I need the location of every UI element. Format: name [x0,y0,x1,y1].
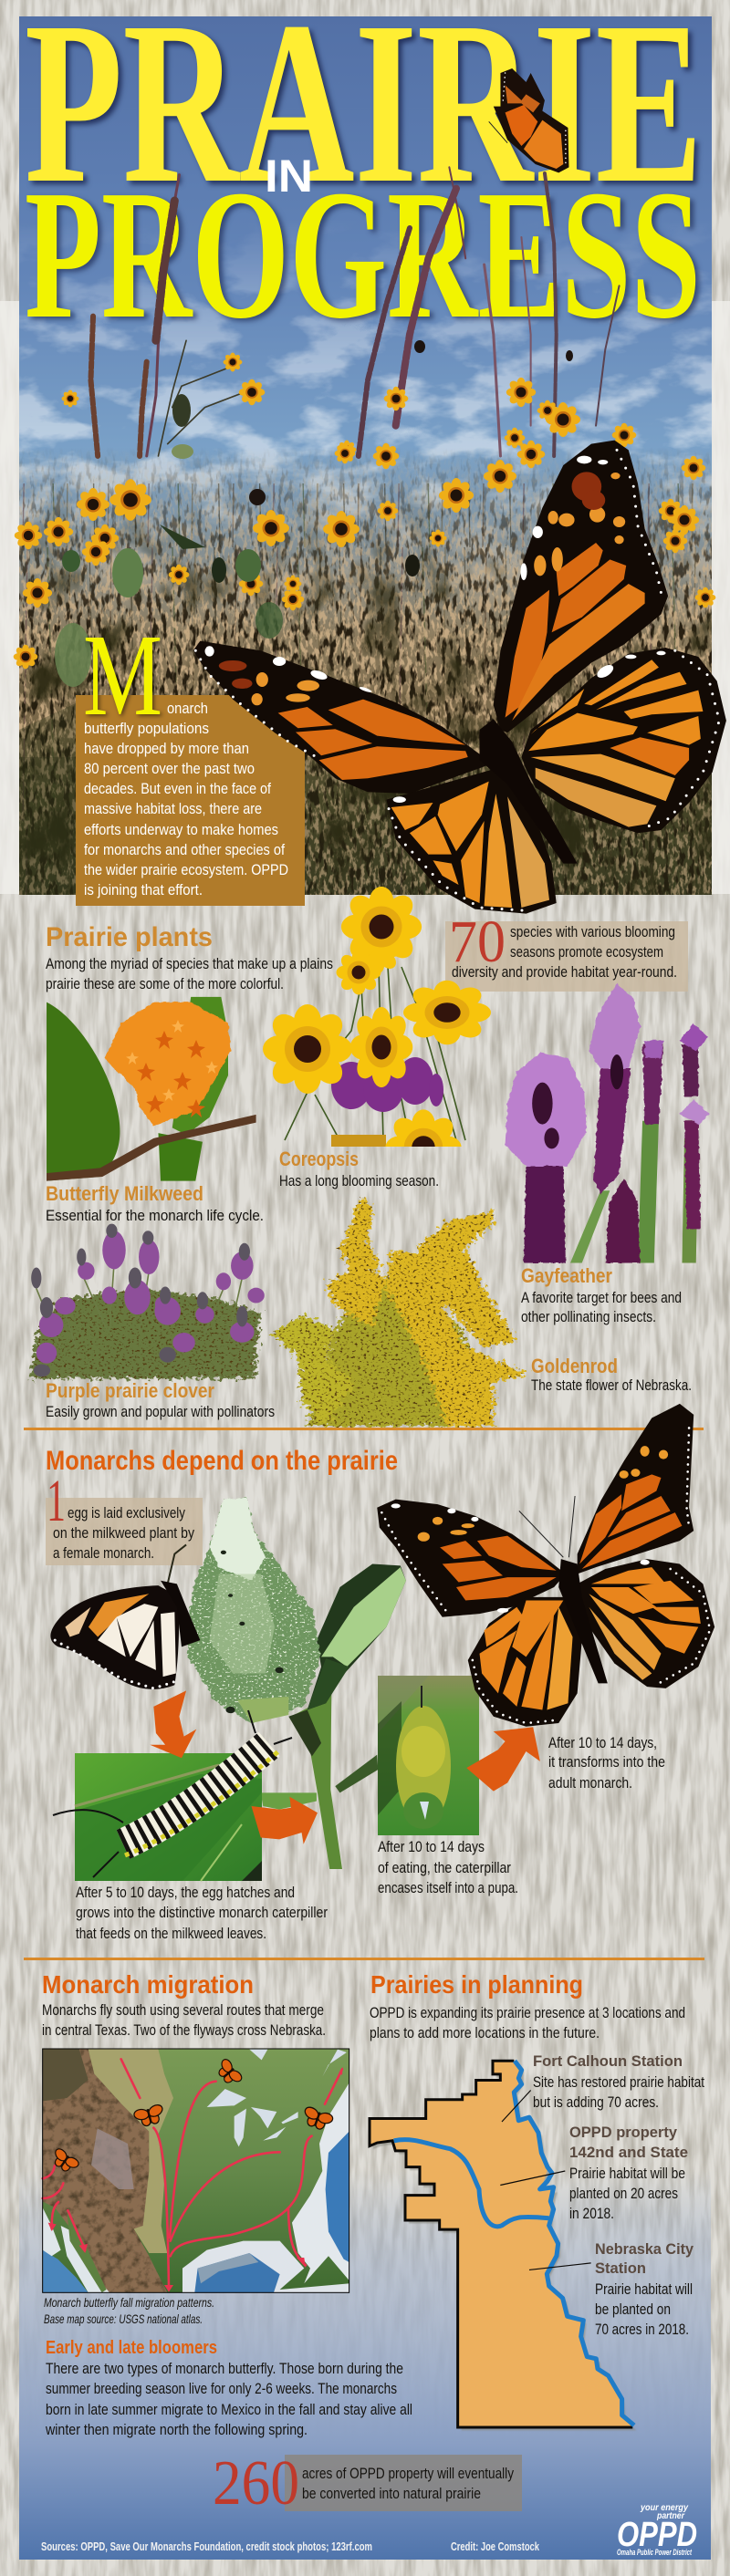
intro text: the wider prairie ecosystem. OPPD [84,861,288,878]
map labels: Fort Calhoun Station [533,2053,683,2070]
label: gayfeather: other pollinating insects. [521,1309,656,1325]
intro text: massive habitat loss, there are [84,800,262,817]
label: gayfeather [521,1264,682,1325]
callout: 70 species: seasons promote ecosystem [510,944,663,961]
map labels: OPPD property [569,2124,678,2141]
section divider rule [24,1428,704,1430]
OPPD logo [617,2503,697,2557]
label: butterfly milkweed: Butterfly Milkweed [46,1182,203,1205]
label: coreopsis [279,1148,439,1189]
text: early and late bloomers: Early and late bloomers [46,2338,217,2358]
intro text panel background [76,695,305,906]
intro text: 80 percent over the past two [84,760,255,777]
OPPD service area map [370,2061,636,2431]
plant: purple prairie clover [30,1224,265,1378]
intro text [83,610,288,898]
section: prairie plants heading and intro: prairie these are some of the more colorful. [46,976,284,992]
life cycle: adult monarch [377,1404,714,1727]
text: early and late bloomers: born in late summer migrate to Mexico in the fall and stay alive all [46,2402,412,2418]
map labels: Prairie habitat will be [569,2166,685,2182]
text: early and late bloomers: summer breeding season live for only 2-6 weeks. The monarchs [46,2381,397,2397]
life cycle captions: grows into the distinctive monarch caterpiller [76,1905,328,1921]
text: early and late bloomers: There are two types of monarch butterfly. Those born during the [46,2361,403,2377]
OPPD logo: partner [656,2511,685,2521]
intro text: have dropped by more than [84,740,249,757]
callout: 70 species: diversity and provide habitat year-round. [452,964,677,981]
map labels: Station [595,2260,646,2277]
callout: 1 egg: on the milkweed plant by [53,1525,195,1542]
label: goldenrod: The state flower of Nebraska. [531,1377,692,1394]
hero photo: prairie sky and meadow [19,16,712,895]
life cycle captions [76,1735,665,1942]
life cycle: pupa photo [378,1676,479,1835]
sunflowers in meadow [14,340,715,687]
label: coreopsis: Coreopsis [279,1148,359,1170]
migration map [43,2049,349,2292]
section: prairie plants heading and intro: Among the myriad of species that make up a plains [46,956,333,972]
intro text: butterfly populations [84,720,209,737]
OPPD logo: OPPD [617,2516,697,2554]
life cycle: caterpillar [53,1710,292,1877]
callout: 260 acres: be converted into natural prairie [302,2486,481,2502]
heading: monarchs depend on the prairie: Monarchs depend on the prairie [46,1446,398,1476]
intro text: M [83,610,162,740]
intro text: is joining that effort. [84,881,203,898]
map labels: but is adding 70 acres. [533,2094,659,2111]
section: prairies in planning heading: plans to add more locations in the future. [370,2025,600,2041]
label: purple prairie clover: Easily grown and popular with pollinators [46,1404,275,1420]
section: monarch migration heading: Monarch migration [42,1970,254,1999]
label: purple prairie clover: Purple prairie clover [46,1379,214,1402]
life cycle captions: adult monarch. [548,1775,632,1792]
map caption: Monarch butterfly fall migration patterns. [44,2295,214,2310]
map labels: in 2018. [569,2206,614,2222]
life cycle: milkweed pod [186,1498,321,1723]
section: monarch migration heading [42,1970,326,2039]
map labels: Nebraska City [595,2241,694,2258]
callout: 70 species: 70 [449,909,506,975]
callout: 260 acres: 260 [213,2448,299,2519]
section: monarch migration heading: Monarchs fly south using several routes that merge [42,2002,324,2019]
map labels: Prairie habitat will [595,2281,693,2298]
life cycle captions: of eating, the caterpillar [378,1860,511,1876]
map labels: 70 acres in 2018. [595,2322,689,2338]
section: prairie plants heading and intro: Prairie plants [46,922,213,952]
big monarch butterfly [193,441,726,914]
life cycle captions: After 10 to 14 days [378,1839,485,1855]
text: early and late bloomers [45,2338,412,2438]
section: prairies in planning heading [370,1970,685,2041]
life cycle captions: After 10 to 14 days, [548,1735,657,1751]
plant: coreopsis [263,887,491,1147]
intro text: onarch [167,700,208,717]
small monarch on title [489,68,568,172]
map labels: 142nd and State [569,2145,688,2161]
OPPD logo: Omaha Public Power District [617,2548,693,2557]
life cycle: female monarch with closed wings [50,1544,200,1689]
label: coreopsis: Has a long blooming season. [279,1173,439,1189]
life cycle: milkweed stem and leaf [261,1564,406,1869]
plant: butterfly milkweed [47,997,256,1181]
life cycle: caterpillar photo [75,1753,262,1881]
map labels [533,2053,704,2338]
callout: 260 acres [213,2448,522,2519]
section: prairies in planning heading: Prairies in planning [370,1970,583,1999]
intro text: for monarchs and other species of [84,841,285,858]
footer credits: Credit: Joe Comstock [451,2540,540,2553]
label: goldenrod [531,1355,692,1394]
callout: 70 species: species with various blooming [510,924,675,940]
label: butterfly milkweed [46,1182,264,1224]
callout: 1 egg: 1 [47,1468,66,1534]
grass stalks over title [90,167,620,456]
label: gayfeather: A favorite target for bees and [521,1290,682,1306]
life cycle captions: that feeds on the milkweed leaves. [76,1926,266,1942]
life cycle captions: encases itself into a pupa. [378,1880,518,1896]
title: Prairie in Progress: IN [265,151,313,202]
label: butterfly milkweed: Essential for the monarch life cycle. [46,1208,264,1224]
bottom blue gradient panel [19,2171,711,2560]
callout: 260 acres: acres of OPPD property will eventually [302,2466,515,2482]
title: Prairie in Progress [25,0,703,357]
label: gayfeather: Gayfeather [521,1264,612,1287]
life cycle captions: it transforms into the [548,1754,665,1771]
text: early and late bloomers: winter then migrate north the following spring. [45,2422,308,2438]
section: monarch migration heading: in central Texas. Two of the flyways cross Nebraska. [42,2022,326,2039]
callout: 1 egg: egg is laid exclusively [68,1505,186,1522]
label: goldenrod: Goldenrod [531,1355,618,1377]
life cycle arrows [150,1690,540,1844]
callout: 70 species [445,909,688,992]
map labels: be planted on [595,2301,671,2318]
label: purple prairie clover [46,1379,275,1420]
map caption: Base map source: USGS national atlas. [44,2311,203,2326]
map labels: planted on 20 acres [569,2186,678,2202]
intro text: efforts underway to make homes [84,821,278,838]
intro text: decades. But even in the face of [84,780,271,797]
section: prairie plants heading and intro [46,922,333,992]
OPPD logo: your energy [640,2503,688,2513]
callout: 1 egg: a female monarch. [53,1545,154,1562]
plant: gayfeather [506,983,710,1263]
callout: 1 egg [46,1468,203,1565]
footer credits: Sources: OPPD, Save Our Monarchs Foundation, credit stock photos; 123rf.com [41,2540,372,2553]
section divider rule [24,1958,704,1960]
life cycle captions: After 5 to 10 days, the egg hatches and [76,1885,295,1901]
map caption [44,2295,214,2326]
plant: goldenrod [272,1196,528,1427]
